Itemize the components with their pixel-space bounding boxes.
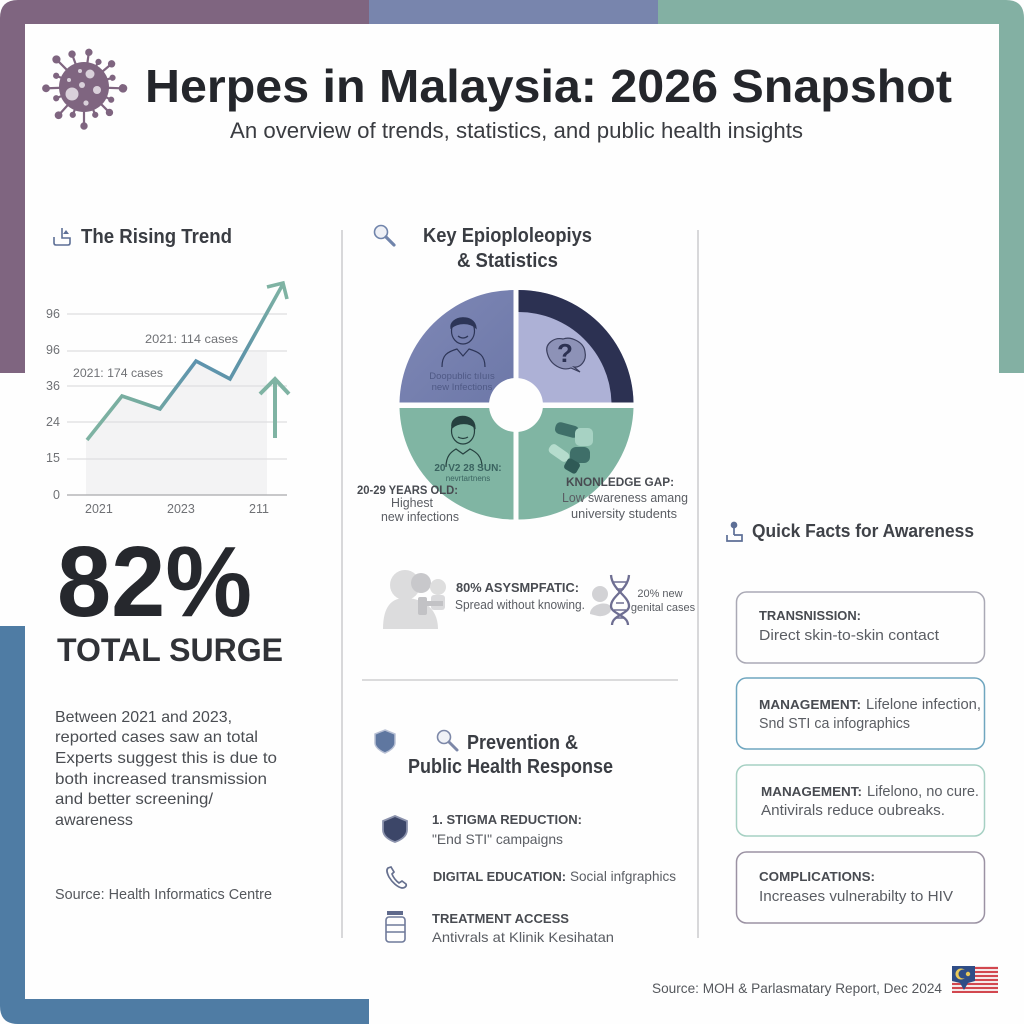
panel: key epidemiology and statistics <box>357 225 998 996</box>
card: management infection: Lifelone infection, <box>866 697 981 713</box>
card: complications: Increases vulnerabilty to HIV <box>759 889 953 905</box>
heading: key statistics <box>423 225 592 272</box>
text block: trend explanation: both increased transmission <box>55 771 267 788</box>
line chart: 211 <box>249 502 269 516</box>
label: 20-29 years old: Highest <box>391 496 434 510</box>
title: Herpes in Malaysia: 2026 Snapshot <box>145 60 952 112</box>
item: treatment access <box>386 911 614 945</box>
text block: trend explanation: reported cases saw an total <box>55 729 258 746</box>
card: management infection: Snd STI ca infographics <box>759 716 910 732</box>
label: age group inside: 20 V2 28 SUN: <box>434 463 502 474</box>
row: asymptomatic statistics <box>383 570 696 629</box>
item: stigma reduction: 1. STIGMA REDUCTION: <box>432 813 582 827</box>
heading: prevention: Public Health Response <box>408 756 613 778</box>
line chart <box>46 283 289 516</box>
card: transmission: Direct skin-to-skin contact <box>759 628 939 644</box>
heading: prevention: Prevention & <box>467 732 578 754</box>
text block: trend explanation <box>55 709 277 829</box>
heading: key statistics: Key Epioploleopiys <box>423 225 592 247</box>
line chart: 2021: 174 cases <box>73 366 163 380</box>
text block: trend explanation: Experts suggest this is due to <box>55 750 277 767</box>
text: 20% new genital cases: 20% new <box>637 588 683 600</box>
card: management cure: Antivirals reduce oubreaks. <box>761 803 945 819</box>
text block: trend explanation: awareness <box>55 812 133 829</box>
line chart: 2023 <box>167 502 195 516</box>
text: 80% asymptomatic: 80% ASYSMPFATIC: <box>456 581 579 595</box>
icon: hand pointer <box>727 522 742 541</box>
source note: Source: Health Informatics Centre <box>55 887 272 903</box>
label: demographic <box>429 371 495 393</box>
text: 80% asymptomatic: Spread without knowing. <box>455 597 585 612</box>
card: complications <box>736 852 984 923</box>
subtitle: An overview of trends, statistics, and public health insights <box>230 118 803 143</box>
donut chart <box>357 290 688 524</box>
icon: trend share <box>54 228 70 245</box>
heading: the rising trend: The Rising Trend <box>81 226 232 248</box>
item: digital education <box>387 867 676 888</box>
text: 80% asymptomatic <box>455 581 585 612</box>
text: 20% new genital cases: genital cases <box>631 602 696 614</box>
label: knowledge gap: KNONLEDGE GAP: <box>566 475 674 489</box>
line chart: 15 <box>46 451 60 465</box>
line chart: 96 <box>46 307 60 321</box>
label: age group inside <box>434 463 502 483</box>
label: 20-29 years old: new infections <box>381 510 459 524</box>
item: treatment access: TREATMENT ACCESS <box>432 912 569 926</box>
icon: person two <box>446 416 482 467</box>
icon: question thought bubble: ? <box>557 338 573 368</box>
label: knowledge gap <box>562 475 688 521</box>
item: stigma reduction: "End STI" campaigns <box>432 831 563 847</box>
big stat: 82% total surge <box>57 526 283 668</box>
card: management cure: Lifelono, no cure. <box>867 784 979 800</box>
icon: shield heading <box>375 730 395 753</box>
icon: silhouettes <box>383 570 446 629</box>
label: demographic: Doopublic tıIuıs <box>429 371 495 382</box>
line chart: 0 <box>53 488 60 502</box>
icon: virus <box>43 49 126 129</box>
icon: malaysia flag <box>952 966 998 993</box>
icon: silhouette small <box>590 586 611 616</box>
item: stigma reduction <box>383 813 582 847</box>
card: management cure <box>736 765 984 836</box>
card: transmission <box>736 592 984 663</box>
item: treatment access: Antivrals at Klinik Kesihatan <box>432 929 614 945</box>
text block: trend explanation: and better screening/ <box>55 791 214 808</box>
card: transmission: TRANSNISSION: <box>759 609 861 623</box>
line chart: 96 <box>46 343 60 357</box>
line chart: 2021: 114 cases <box>145 332 238 346</box>
card: management infection <box>736 678 984 749</box>
text block: trend explanation: Between 2021 and 2023, <box>55 709 232 726</box>
card: management cure: MANAGEMENT: <box>761 785 862 799</box>
panel: the rising trend <box>46 226 289 903</box>
icon: magnifier <box>374 226 394 245</box>
heading: key statistics: & Statistics <box>457 250 558 272</box>
label: demographic: new Infections <box>432 382 493 393</box>
big stat: 82% total surge: TOTAL SURGE <box>57 632 283 668</box>
line chart: 2021 <box>85 502 113 516</box>
line chart: 24 <box>46 415 60 429</box>
footer source: Source: MOH & Parlasmatary Report, Dec 2024 <box>652 981 942 996</box>
big stat: 82% total surge: 82% <box>57 526 252 638</box>
icon: abstract knowledge puzzle <box>547 421 593 475</box>
item: digital education: Social infgraphics <box>570 869 676 884</box>
line chart: 36 <box>46 379 60 393</box>
label: 20-29 years old <box>357 483 459 524</box>
label: 20-29 years old: 20-29 YEARS OLD: <box>357 483 458 497</box>
heading: prevention <box>408 732 613 778</box>
icon: magnifier heading <box>438 730 457 750</box>
icon: question thought bubble <box>547 338 585 372</box>
panel: quick facts for awareness <box>727 521 984 923</box>
icon: person one <box>442 318 485 367</box>
panel: prevention and public health response <box>375 730 676 945</box>
label: age group inside: nevrtartnens <box>446 474 490 483</box>
heading: quick facts: Quick Facts for Awareness <box>752 521 974 541</box>
item: digital education: DIGITAL EDUCATION: <box>433 870 566 884</box>
text: 20% new genital cases <box>631 588 696 614</box>
icon: dna helix <box>611 575 629 625</box>
card: complications: COMPLICATIONS: <box>759 870 875 884</box>
card: management infection: MANAGEMENT: <box>759 698 861 712</box>
label: knowledge gap: Low swareness amang <box>562 490 688 505</box>
label: knowledge gap: university students <box>571 506 677 521</box>
